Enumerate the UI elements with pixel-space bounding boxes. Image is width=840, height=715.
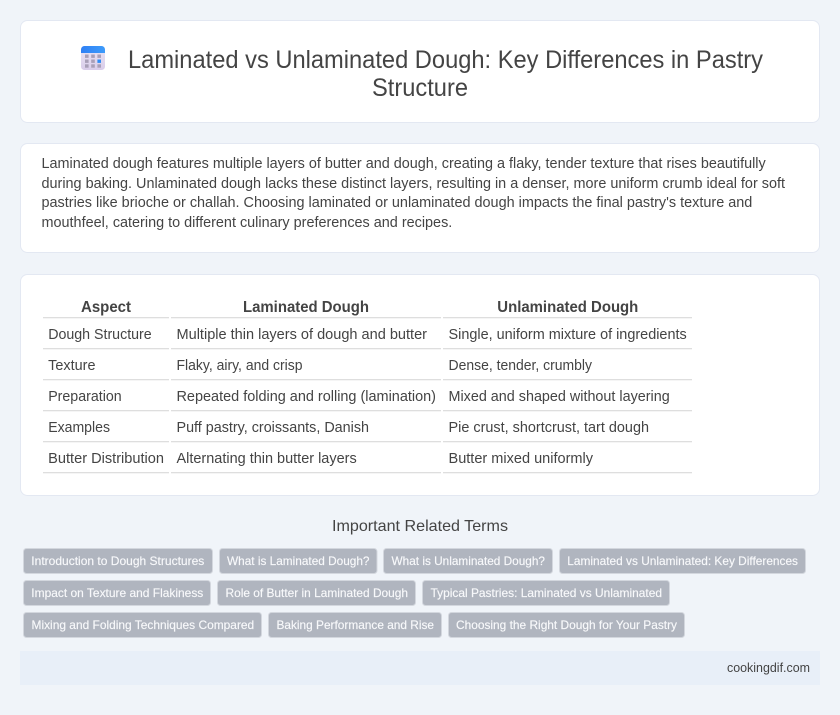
table header row: Unlaminated Dough bbox=[497, 299, 638, 316]
tag bbox=[560, 548, 806, 574]
table row: preparation bbox=[43, 389, 692, 411]
tag bbox=[422, 580, 670, 606]
title: Structure bbox=[372, 74, 468, 102]
panel: intro paragraph bbox=[20, 144, 820, 252]
table row: dough structure: Multiple thin layers of dough and butter bbox=[176, 327, 427, 343]
table header row bbox=[43, 299, 692, 318]
tag: Laminated vs Unlaminated: Key Differences bbox=[567, 554, 798, 568]
text block: introduction: mouthfeel, catering to different culinary preferences and recipes. bbox=[42, 215, 452, 231]
table row: examples: Examples bbox=[48, 420, 110, 436]
table row: texture: Dense, tender, crumbly bbox=[448, 358, 593, 374]
tag bbox=[448, 612, 684, 638]
table row: preparation: Mixed and shaped without layering bbox=[448, 389, 670, 405]
table row: preparation: Preparation bbox=[48, 389, 122, 405]
table row: preparation: Repeated folding and rolling (lamination) bbox=[176, 389, 436, 405]
title: Laminated vs Unlaminated Dough: Key Differences in Pastry bbox=[128, 46, 763, 74]
table row: butter distribution: Butter mixed uniformly bbox=[448, 451, 594, 467]
table row: butter distribution: Butter Distribution bbox=[48, 451, 164, 467]
tag bbox=[24, 548, 212, 574]
table row: dough structure bbox=[43, 327, 692, 349]
table row: texture bbox=[43, 358, 692, 380]
table row: examples: Puff pastry, croissants, Danish bbox=[176, 420, 369, 436]
tag bbox=[268, 612, 442, 638]
tag bbox=[220, 548, 377, 574]
tag: What is Unlaminated Dough? bbox=[392, 554, 545, 568]
table header row: Aspect bbox=[81, 299, 132, 316]
table row: texture: Texture bbox=[48, 358, 96, 374]
table row: examples bbox=[43, 420, 692, 442]
tag: Impact on Texture and Flakiness bbox=[31, 586, 203, 600]
table row: butter distribution bbox=[43, 451, 692, 473]
tag: Baking Performance and Rise bbox=[276, 618, 434, 632]
tag: Choosing the Right Dough for Your Pastry bbox=[456, 618, 677, 632]
tag bbox=[218, 580, 416, 606]
table header row: Laminated Dough bbox=[243, 299, 369, 316]
icon: calendar bbox=[81, 46, 105, 70]
tag bbox=[24, 580, 210, 606]
title bbox=[128, 46, 763, 102]
footer source text: cookingdif.com bbox=[727, 660, 810, 675]
text block: introduction: during baking. Unlaminated dough lacks these distinct layers, resulting in a denser, more uniform crumb ideal for soft bbox=[42, 176, 785, 192]
text block: introduction bbox=[42, 156, 785, 231]
panel: comparison table bbox=[20, 274, 820, 496]
tag: What is Laminated Dough? bbox=[227, 554, 370, 568]
tag bbox=[24, 612, 262, 638]
footer bar bbox=[20, 651, 820, 685]
panel: title card bbox=[20, 20, 820, 122]
tag bbox=[384, 548, 552, 574]
tag: Role of Butter in Laminated Dough bbox=[226, 586, 408, 600]
tag: Introduction to Dough Structures bbox=[31, 554, 204, 568]
text block: introduction: Laminated dough features multiple layers of butter and dough, creating a flaky, tender texture that rises beautifully bbox=[42, 156, 766, 172]
tag: Mixing and Folding Techniques Compared bbox=[32, 618, 254, 632]
text block: introduction: pastries like brioche or challah. Choosing laminated or unlaminated dough impacts the final pastry's texture and bbox=[42, 195, 752, 211]
table row: dough structure: Dough Structure bbox=[48, 327, 152, 343]
tag: Typical Pastries: Laminated vs Unlaminated bbox=[430, 586, 662, 600]
tag group: related terms bbox=[24, 548, 806, 638]
table row: butter distribution: Alternating thin butter layers bbox=[176, 451, 357, 467]
table row: examples: Pie crust, shortcrust, tart dough bbox=[448, 420, 649, 436]
heading: important related terms: Important Related Terms bbox=[332, 518, 508, 535]
table row: texture: Flaky, airy, and crisp bbox=[176, 358, 302, 374]
table row: dough structure: Single, uniform mixture of ingredients bbox=[448, 327, 687, 343]
